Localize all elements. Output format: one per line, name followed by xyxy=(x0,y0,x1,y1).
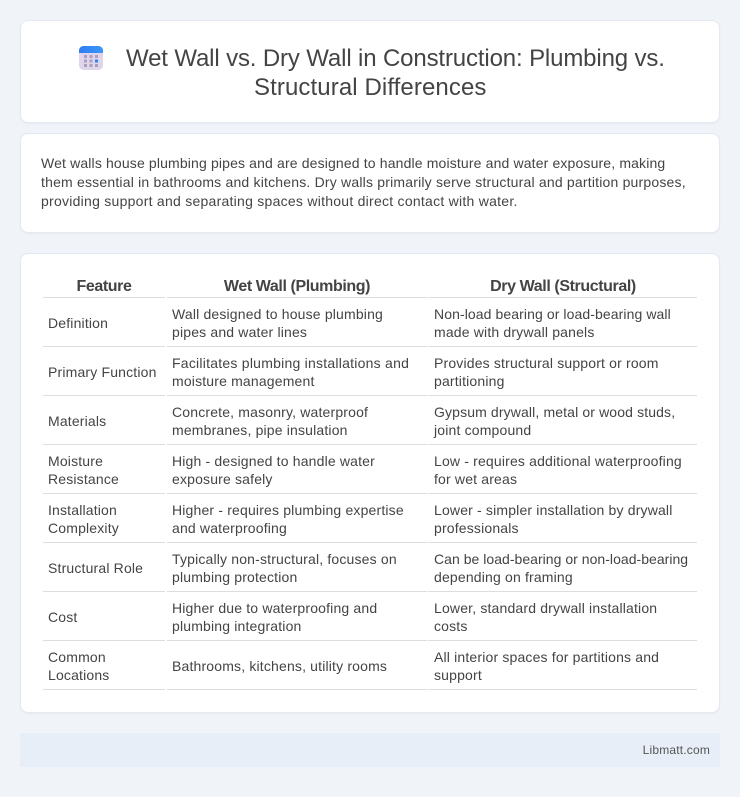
header panel xyxy=(20,20,720,123)
table: Low - requires additional waterproofing xyxy=(434,453,682,469)
row: Moisture Resistance: Resistance xyxy=(48,471,119,487)
row: Installation Complexity: Installation xyxy=(48,502,117,518)
title xyxy=(126,45,665,101)
table: Facilitates plumbing installations and xyxy=(172,355,409,371)
table: exposure safely xyxy=(172,471,273,487)
row: Materials: Materials xyxy=(48,413,106,429)
table: support xyxy=(434,667,482,683)
table: Typically non-structural, focuses on xyxy=(172,551,397,567)
table: professionals xyxy=(434,520,519,536)
row: Installation Complexity: Complexity xyxy=(48,520,119,536)
intro text: providing support and separating spaces without direct contact with water. xyxy=(41,193,518,209)
footer source: Libmatt.com xyxy=(643,743,710,757)
table: Higher - requires plumbing expertise xyxy=(172,502,404,518)
table: All interior spaces for partitions and xyxy=(434,649,659,665)
row: Moisture Resistance xyxy=(48,453,119,487)
row: Moisture Resistance: Moisture xyxy=(48,453,103,469)
table: Provides structural support or room xyxy=(434,355,659,371)
row: Cost: Cost xyxy=(48,609,77,625)
header: Feature: Feature xyxy=(76,278,132,295)
row: Installation Complexity xyxy=(48,502,119,536)
table: joint compound xyxy=(434,422,531,438)
table: Wall designed to house plumbing xyxy=(172,306,383,322)
comparison table panel xyxy=(20,253,720,713)
table: costs xyxy=(434,618,468,634)
intro text: Wet walls house plumbing pipes and are designed to handle moisture and water exposure, making xyxy=(41,155,665,171)
intro text: them essential in bathrooms and kitchens. Dry walls primarily serve structural and partition purposes, xyxy=(41,174,686,190)
table: Gypsum drywall, metal or wood studs, xyxy=(434,404,675,420)
row: Structural Role: Structural Role xyxy=(48,560,143,576)
table: membranes, pipe insulation xyxy=(172,422,348,438)
row: Common Locations xyxy=(48,649,109,683)
header: Wet Wall: Wet Wall (Plumbing) xyxy=(224,278,370,295)
row: Primary Function: Primary Function xyxy=(48,364,157,380)
row: Common Locations: Locations xyxy=(48,667,109,683)
table: Can be load-bearing or non-load-bearing xyxy=(434,551,688,567)
header: Dry Wall: Dry Wall (Structural) xyxy=(490,278,636,295)
row: Definition: Definition xyxy=(48,315,108,331)
table xyxy=(43,278,697,690)
footer bar xyxy=(20,733,720,767)
table: and waterproofing xyxy=(172,520,287,536)
title: Wet Wall vs. Dry Wall in Construction: Plumbing vs. xyxy=(126,45,665,72)
row: Common Locations: Common xyxy=(48,649,106,665)
table: Bathrooms, kitchens, utility rooms xyxy=(172,658,387,674)
table: plumbing integration xyxy=(172,618,301,634)
table: pipes and water lines xyxy=(172,324,307,340)
table: partitioning xyxy=(434,373,505,389)
table: depending on framing xyxy=(434,569,573,585)
table: moisture management xyxy=(172,373,315,389)
table: made with drywall panels xyxy=(434,324,594,340)
table: Non-load bearing or load-bearing wall xyxy=(434,306,671,322)
table: High - designed to handle water xyxy=(172,453,375,469)
table: plumbing protection xyxy=(172,569,297,585)
table: Concrete, masonry, waterproof xyxy=(172,404,368,420)
intro panel xyxy=(20,133,720,233)
table: Higher due to waterproofing and xyxy=(172,600,377,616)
table: Lower, standard drywall installation xyxy=(434,600,657,616)
table: Lower - simpler installation by drywall xyxy=(434,502,672,518)
table: for wet areas xyxy=(434,471,517,487)
title: Structural Differences xyxy=(254,74,487,101)
intro text xyxy=(41,155,686,209)
icon: calendar xyxy=(79,46,103,70)
